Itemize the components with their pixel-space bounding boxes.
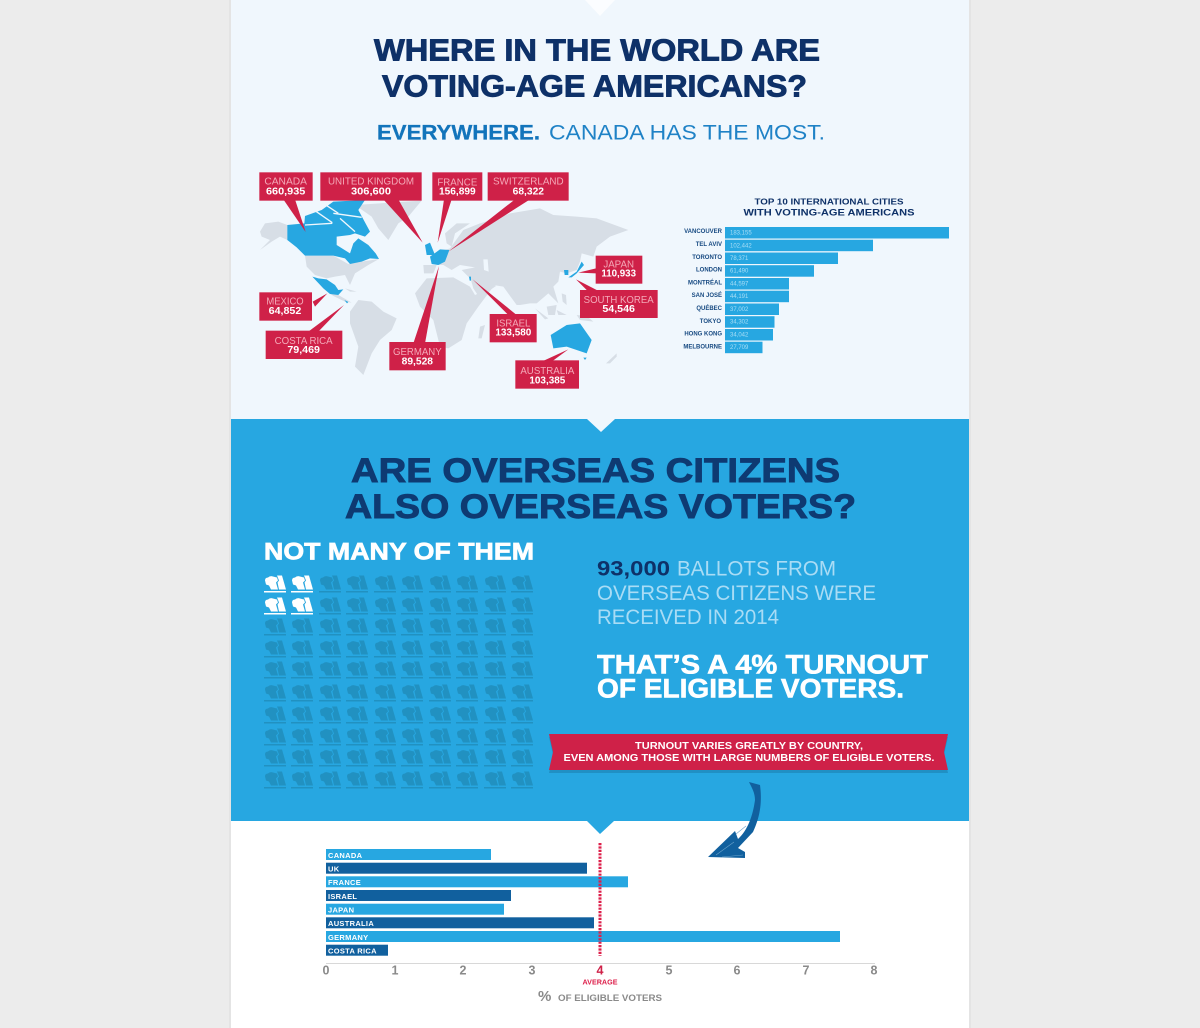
city values: 27,709 (730, 345, 749, 351)
panel: world section background (231, 0, 969, 419)
city labels: SAN JOSÉ (692, 291, 722, 299)
bars (725, 227, 949, 353)
bar labels: COSTA RICA (328, 946, 377, 956)
heading: overseas citizens: ALSO OVERSEAS VOTERS? (345, 488, 856, 526)
map: callout text: 156,899 (439, 186, 476, 197)
axis labels: 5 (666, 964, 673, 978)
pictogram: ballots, 4 of 100 cast (264, 576, 533, 788)
city values: 44,597 (730, 282, 749, 288)
bar labels: AUSTRALIA (328, 919, 374, 928)
map: callout text: 133,580 (495, 328, 531, 339)
city labels: TORONTO (692, 255, 722, 261)
map: callout text: 110,933 (601, 269, 637, 280)
text block: ballots received: 93,000 (597, 558, 670, 580)
bar labels: JAPAN (328, 906, 354, 914)
axis labels (323, 964, 878, 978)
world map (259, 172, 658, 389)
city labels: TEL AVIV (696, 242, 722, 248)
map: callout text: CANADA (264, 177, 308, 188)
axis title: % (538, 988, 551, 1005)
arrow: brush stroke (708, 782, 761, 858)
city values (730, 230, 752, 351)
average label: AVERAGE (582, 980, 618, 986)
text block: turnout: THAT’S A 4% TURNOUT (597, 650, 929, 680)
map: callout text: GERMANY (393, 347, 442, 358)
city values: 44,191 (730, 294, 749, 300)
map: Eurasia, Africa, Oceania (415, 208, 628, 363)
title: where in the world: VOTING-AGE AMERICANS? (382, 68, 807, 104)
map: Americas (260, 200, 422, 375)
text block: turnout: OF ELIGIBLE VOTERS. (597, 674, 904, 704)
axis title: OF ELIGIBLE VOTERS (558, 993, 662, 1003)
average line (598, 843, 602, 956)
panel: turnout chart background (231, 821, 969, 1028)
text block: ballots received: BALLOTS FROM (677, 558, 836, 580)
section notch (587, 821, 614, 834)
axis labels: 2 (460, 964, 467, 978)
city values: 34,042 (730, 332, 749, 338)
map: callout text: 89,528 (402, 356, 434, 367)
city labels: TOKYO (700, 319, 721, 325)
bar labels: ISRAEL (328, 892, 357, 901)
heading: overseas citizens (345, 452, 856, 526)
heading: not many of them: NOT MANY OF THEM (264, 538, 534, 566)
map: callout text: 306,600 (351, 186, 391, 197)
subtitle: CANADA HAS THE MOST. (549, 122, 825, 144)
map: callout pointers (283, 199, 597, 362)
city values: 183,155 (730, 230, 752, 236)
map: callout text: 54,546 (602, 304, 636, 315)
chart title: WITH VOTING-AGE AMERICANS (744, 208, 914, 218)
axis labels: 0 (323, 964, 330, 978)
map: callout text: MEXICO (266, 297, 304, 308)
axis title (538, 988, 662, 1005)
ribbon callout (549, 734, 948, 773)
city values: 34,302 (730, 320, 749, 326)
top notch (585, 0, 615, 16)
map: callout text (264, 177, 654, 387)
map: callout text: SWITZERLAND (493, 177, 564, 188)
ribbon callout: TURNOUT VARIES GREATLY BY COUNTRY, (635, 741, 863, 752)
bar chart: top 10 cities (683, 196, 949, 353)
chart title (744, 196, 914, 218)
map: callout text: 64,852 (269, 306, 301, 317)
axis labels: 6 (734, 964, 741, 978)
map: callout labels (259, 172, 658, 389)
chart title: TOP 10 INTERNATIONAL CITIES (754, 196, 904, 206)
bar labels: FRANCE (328, 878, 361, 887)
axis labels: 1 (392, 964, 399, 978)
city labels: MELBOURNE (683, 344, 722, 350)
panel: overseas voters section background (231, 419, 969, 821)
map: callout text: 103,385 (529, 376, 566, 387)
map: callout text: ISRAEL (496, 318, 531, 329)
subtitle (377, 122, 825, 144)
bar labels (328, 851, 377, 956)
bars (326, 849, 840, 956)
map: callout text: JAPAN (603, 260, 634, 271)
city labels: HONG KONG (684, 332, 722, 338)
map: callout text: 79,469 (287, 345, 321, 356)
city labels (683, 229, 723, 350)
text block: turnout (597, 650, 929, 704)
axis labels: 7 (803, 964, 810, 978)
text block: ballots received: OVERSEAS CITIZENS WERE (597, 582, 876, 605)
text block: ballots received: RECEIVED IN 2014 (597, 606, 779, 629)
subtitle: EVERYWHERE. (377, 122, 540, 144)
bar chart: turnout by country (323, 843, 878, 1005)
title: where in the world (374, 32, 820, 104)
section notch (587, 419, 615, 432)
axis labels: 4 (597, 964, 604, 978)
axis labels: 8 (871, 964, 878, 978)
bar labels: GERMANY (328, 933, 368, 942)
map: callout text: FRANCE (437, 177, 478, 188)
ribbon callout: EVEN AMONG THOSE WITH LARGE NUMBERS OF ELIGIBLE VOTERS. (564, 753, 935, 764)
city values: 37,002 (730, 307, 749, 313)
city values: 61,490 (730, 268, 749, 274)
city values: 78,371 (730, 256, 749, 262)
city values: 102,442 (730, 244, 752, 250)
axis labels: 3 (529, 964, 536, 978)
city labels: LONDON (696, 268, 722, 274)
city labels: VANCOUVER (684, 229, 723, 235)
map: callout text: SOUTH KOREA (584, 295, 654, 306)
map: callout text: AUSTRALIA (520, 366, 575, 377)
bar labels: CANADA (328, 851, 363, 860)
city labels: QUÉBEC (696, 304, 723, 312)
heading: overseas citizens: ARE OVERSEAS CITIZENS (351, 452, 840, 490)
map: callout text: 68,322 (513, 186, 544, 197)
city labels: MONTRÉAL (688, 278, 722, 286)
text block: ballots received (597, 558, 876, 629)
map: callout text: UNITED KINGDOM (328, 177, 414, 188)
map: callout text: 660,935 (266, 186, 306, 197)
axis (326, 963, 875, 964)
map: callout text: COSTA RICA (275, 336, 333, 347)
title: where in the world: WHERE IN THE WORLD ARE (374, 32, 820, 68)
bar labels: UK (328, 864, 340, 874)
